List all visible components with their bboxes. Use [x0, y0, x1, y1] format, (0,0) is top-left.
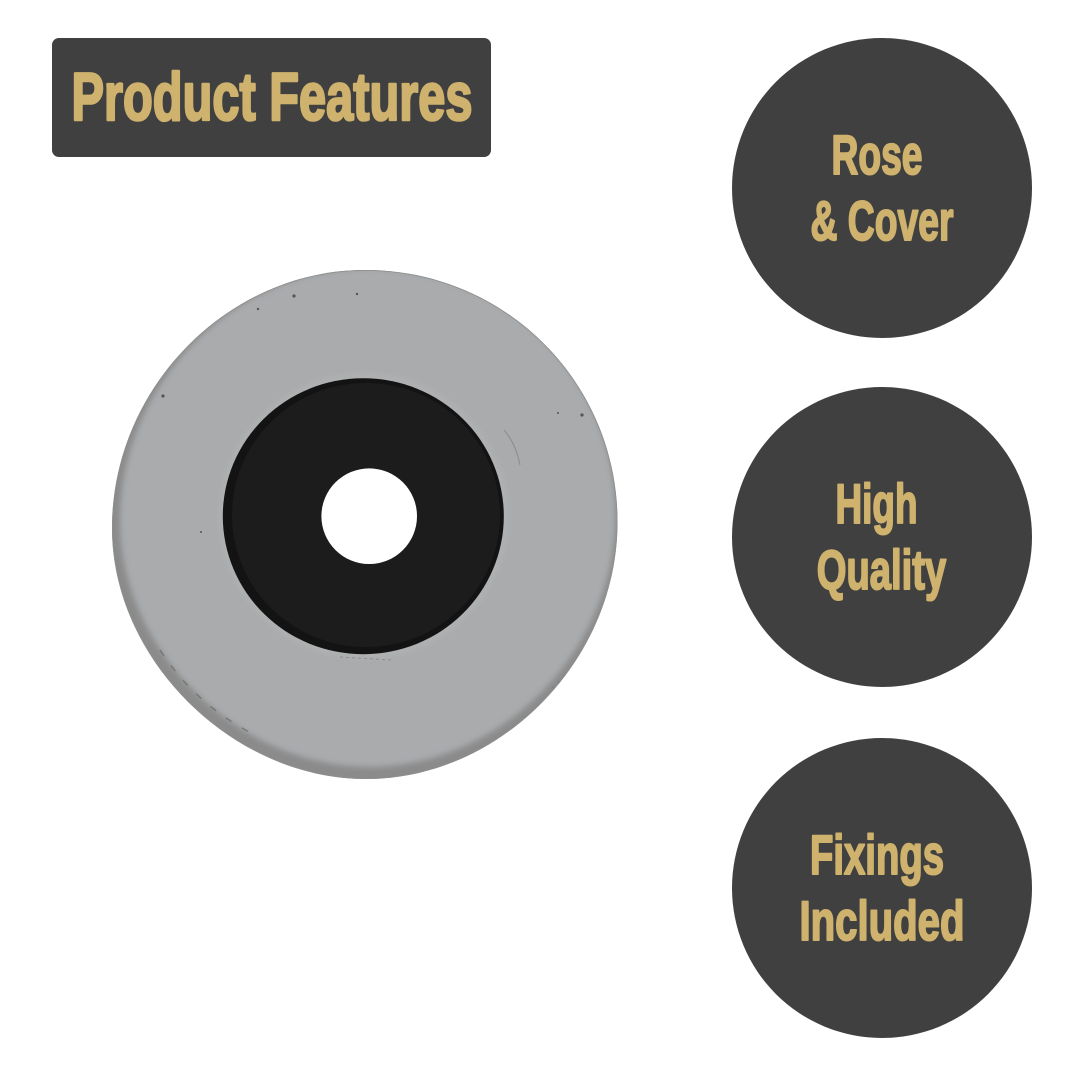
feature badge: fixings included: [732, 738, 1032, 1038]
title: Product Features: [72, 59, 472, 135]
feature badge: high quality: High: [836, 472, 918, 535]
centre hole: [321, 468, 417, 564]
feature badge: high quality: Quality: [817, 538, 946, 601]
feature badge: rose and cover: [732, 38, 1032, 338]
title: [52, 38, 491, 157]
feature badge: high quality: [732, 387, 1032, 687]
feature badge: rose and cover: Rose: [832, 123, 922, 186]
black rubber disc: [223, 378, 504, 654]
feature badge: fixings included: Fixings: [810, 823, 944, 886]
feature badge: rose and cover: & Cover: [810, 189, 954, 252]
product photo: rose and cover: [112, 268, 618, 779]
feature badge: fixings included: Included: [800, 889, 964, 952]
